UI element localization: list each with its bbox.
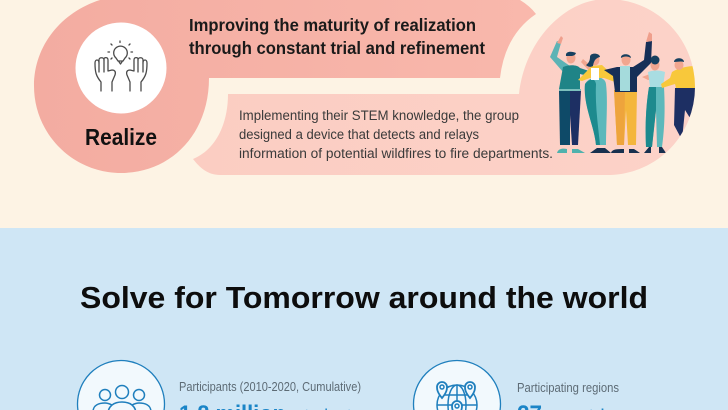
heading: improving maturity: through constant trial and refinement: [189, 38, 485, 58]
stat: participating regions: Participating regions: [517, 380, 619, 395]
icon: participating regions globe: [414, 360, 500, 410]
icon circle: realize: [76, 22, 166, 114]
panel: solve for tomorrow section: [0, 228, 728, 410]
illustration: group of people celebrating: [550, 32, 696, 153]
text block: description: information of potential wildfires to fire departments.: [239, 146, 553, 161]
panel: description and illustration background: [193, 0, 695, 175]
stat: participating regions: [518, 382, 619, 410]
text block: description: Implementing their STEM knowledge, the group: [239, 108, 519, 123]
stat: participants: [179, 379, 361, 410]
title: Solve for Tomorrow around the world: [80, 280, 648, 315]
text block: description: [239, 108, 553, 161]
icon: participants: [78, 360, 164, 410]
panel: realize heading shape: [34, 0, 536, 173]
stat: participants: Participants (2010-2020, Cumulative): [179, 379, 361, 394]
label: Realize: Realize: [85, 124, 157, 150]
heading: improving maturity: Improving the maturity of realization: [189, 15, 476, 35]
text block: description: designed a device that detects and relays: [239, 127, 479, 142]
heading: improving maturity: [189, 15, 485, 58]
